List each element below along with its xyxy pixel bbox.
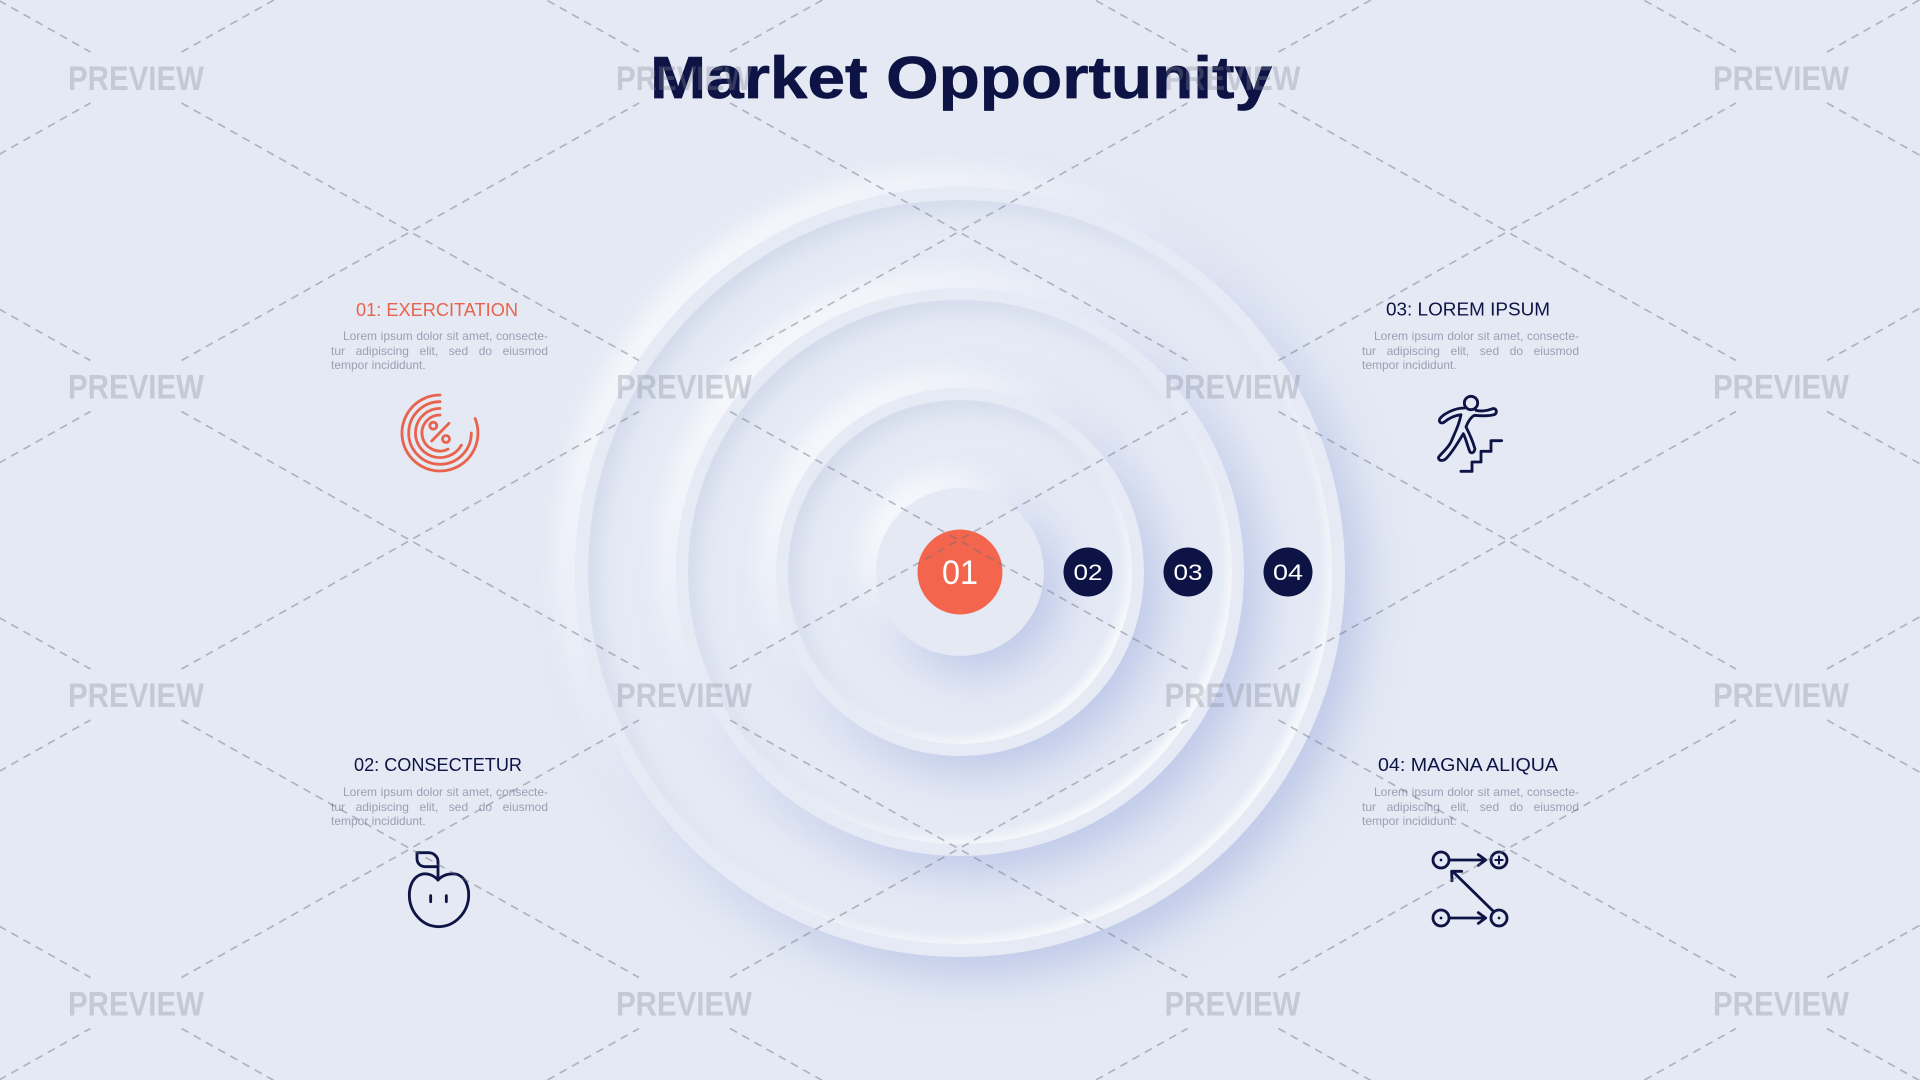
ring: second (676, 288, 1244, 856)
concentric neumorphic rings (560, 172, 1380, 992)
badge 02: 02 (1074, 560, 1102, 585)
panel: 01 exercitation (331, 300, 548, 472)
text block: 04: Lorem ipsum dolor sit amet, consecte- (1374, 785, 1579, 799)
icon: runner on stairs (1437, 394, 1504, 473)
text block: 02 (331, 785, 548, 828)
ring: third (776, 388, 1144, 756)
watermark overlay: PREVIEW (68, 60, 205, 98)
ring: outer (575, 187, 1345, 957)
title: Market Opportunity (650, 45, 1272, 111)
text block: 04 (1362, 785, 1579, 828)
text block: 02: Lorem ipsum dolor sit amet, consecte- (343, 785, 548, 799)
badge 02 (1064, 548, 1112, 596)
panel: 04 magna aliqua (1362, 755, 1579, 928)
watermark overlay: PREVIEW (616, 677, 753, 715)
text block: 03 (1362, 329, 1579, 372)
badge 03 (1164, 548, 1212, 596)
ring: outer dish (588, 200, 1332, 944)
text block: 03: Lorem ipsum dolor sit amet, consecte- (1374, 329, 1579, 343)
icon: apple (408, 851, 470, 928)
heading: 02: 02: CONSECTETUR (354, 755, 522, 775)
watermark overlay: PREVIEW (1164, 986, 1301, 1024)
watermark overlay: PREVIEW (1713, 677, 1850, 715)
watermark overlay: PREVIEW (1713, 986, 1850, 1024)
watermark overlay: PREVIEW (1164, 60, 1301, 98)
text block: 02: tur adipiscing elit, sed do eiusmod (331, 800, 548, 814)
icon: process flow arrows (1432, 850, 1508, 928)
text block: 03: tur adipiscing elit, sed do eiusmod (1362, 344, 1579, 358)
watermark overlay: PREVIEW (616, 368, 753, 406)
watermark overlay: PREVIEW (1164, 368, 1301, 406)
ring: second dish (688, 300, 1232, 844)
text block: 04: tur adipiscing elit, sed do eiusmod (1362, 800, 1579, 814)
text block: 03: tempor incididunt. (1362, 358, 1457, 372)
badge 03: 03 (1174, 560, 1202, 585)
text block: 01: tur adipiscing elit, sed do eiusmod (331, 344, 548, 358)
ring: centre disc (876, 488, 1044, 656)
text block: 02: tempor incididunt. (331, 814, 426, 828)
panel: 03 lorem ipsum (1362, 300, 1579, 473)
badge 01 (918, 530, 1002, 614)
heading: 03: 03: LOREM IPSUM (1386, 300, 1550, 320)
text block: 01: Lorem ipsum dolor sit amet, consecte- (343, 329, 548, 343)
text block: 04: tempor incididunt. (1362, 814, 1457, 828)
badge 04: 04 (1273, 560, 1303, 585)
watermark overlay: PREVIEW (1713, 368, 1850, 406)
text block: 01: tempor incididunt. (331, 358, 426, 372)
watermark overlay: PREVIEW (68, 368, 205, 406)
panel: 02 consectetur (331, 755, 548, 928)
watermark overlay: PREVIEW (1713, 60, 1850, 98)
watermark overlay: PREVIEW (68, 677, 205, 715)
icon: percent target (400, 394, 480, 472)
heading: 04: 04: MAGNA ALIQUA (1378, 755, 1558, 775)
badge 04 (1264, 548, 1312, 596)
badge 01: 01 (942, 554, 978, 592)
watermark overlay: PREVIEW (616, 60, 753, 98)
watermark overlay: PREVIEW (68, 986, 205, 1024)
text block: 01 (331, 329, 548, 372)
ring: third dish (788, 400, 1132, 744)
heading: 01: 01: EXERCITATION (356, 300, 518, 320)
watermark overlay: PREVIEW (1164, 677, 1301, 715)
watermark overlay: PREVIEW (616, 986, 753, 1024)
